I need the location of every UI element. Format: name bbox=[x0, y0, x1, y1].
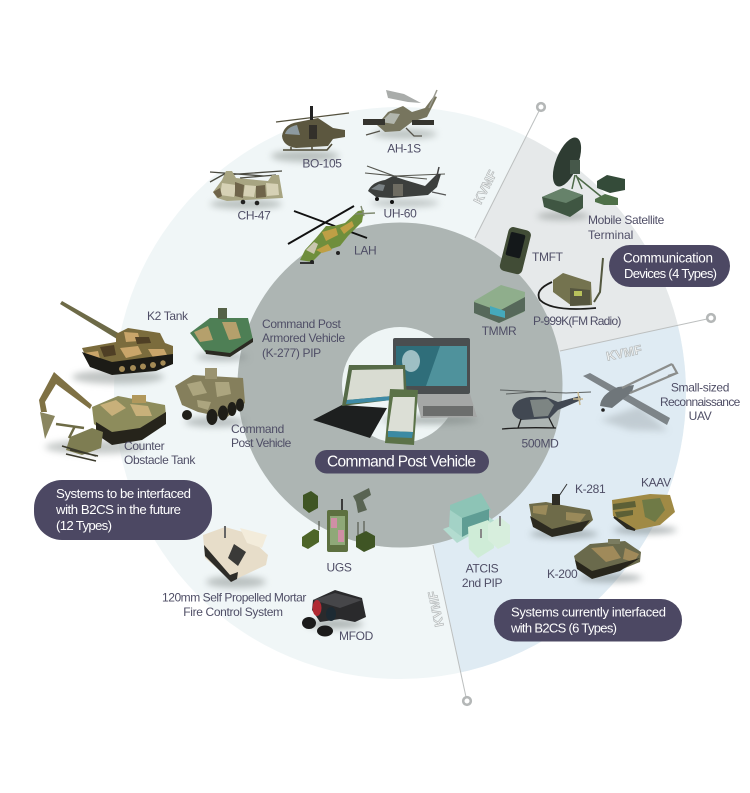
icon: CH-47 helicopter bbox=[210, 171, 283, 209]
label: LAH: LAH bbox=[354, 244, 376, 258]
label: K-281: K-281 bbox=[575, 482, 606, 496]
icon: KAAV vehicle bbox=[612, 494, 677, 534]
pill: command post vehicle bbox=[315, 450, 489, 474]
label: AH-1S: AH-1S bbox=[387, 142, 421, 156]
connector: KVMF line right bbox=[560, 314, 715, 351]
icon: UH-60 helicopter bbox=[365, 166, 446, 207]
pill: systems currently interfaced bbox=[494, 599, 682, 642]
label: ATCIS 2nd PIP bbox=[462, 562, 502, 590]
icon: command post vehicle bbox=[175, 368, 245, 427]
label: TMMR: TMMR bbox=[482, 324, 517, 338]
icon: counter obstacle tank bbox=[39, 372, 166, 461]
label: CH-47: CH-47 bbox=[238, 208, 271, 222]
label: command post armored vehicle: Command Post bbox=[262, 317, 342, 331]
label: command post vehicle bbox=[231, 422, 292, 450]
label: counter obstacle tank: Obstacle Tank bbox=[124, 453, 196, 467]
connector: KVMF line bottom bbox=[433, 545, 471, 705]
connector: KVMF line top bbox=[475, 103, 545, 238]
icon: K2 tank bbox=[60, 301, 173, 384]
ring: inner circle bbox=[342, 327, 458, 443]
pill: systems to be interfaced in future: (12 Types) bbox=[56, 518, 112, 533]
icon: UGS sensor set bbox=[302, 488, 375, 552]
pill: command post vehicle: Command Post Vehicle bbox=[327, 454, 476, 470]
pill: systems to be interfaced in future: Systems to be interfaced bbox=[56, 486, 191, 501]
pill: communication devices bbox=[609, 245, 730, 287]
label: KVMF top: KVMF bbox=[471, 168, 500, 206]
label: KVMF bottom: KVMF bbox=[425, 590, 447, 628]
label: small-sized reconnaissance UAV: UAV bbox=[689, 409, 712, 423]
pill: systems currently interfaced: with B2CS (6 Types) bbox=[510, 620, 617, 636]
icon: command post armored vehicle bbox=[190, 308, 253, 361]
pill: systems currently interfaced: Systems currently interfaced bbox=[511, 604, 666, 620]
label: mobile satellite terminal: Terminal bbox=[588, 228, 633, 242]
ring: middle circle bbox=[238, 222, 562, 548]
label: 500MD: 500MD bbox=[522, 436, 559, 450]
label: command post armored vehicle bbox=[262, 317, 345, 360]
label: command post vehicle: Command bbox=[231, 422, 284, 436]
label: counter obstacle tank: Counter bbox=[124, 439, 165, 453]
label: K-200: K-200 bbox=[547, 567, 578, 581]
label: command post vehicle: Post Vehicle bbox=[231, 436, 292, 450]
icon: P-999K FM radio bbox=[538, 258, 603, 309]
icon: BO-105 helicopter bbox=[271, 106, 349, 162]
icon: 500MD helicopter bbox=[500, 390, 591, 429]
pill: communication devices: Communication bbox=[623, 250, 713, 266]
label: KVMF right: KVMF bbox=[605, 342, 643, 364]
pill: systems to be interfaced in future: with B2CS in the future bbox=[55, 502, 181, 517]
label: UGS: UGS bbox=[327, 560, 352, 574]
label: mobile satellite terminal: Mobile Satellite bbox=[588, 213, 665, 227]
pill: systems to be interfaced in future bbox=[34, 480, 212, 540]
icon: K-281 vehicle bbox=[529, 484, 598, 538]
icon: TMFT handheld bbox=[499, 226, 532, 275]
diagram: concentric rings and sectors bbox=[114, 102, 716, 706]
icon: ATCIS buildings bbox=[443, 493, 510, 558]
label: BO-105: BO-105 bbox=[302, 156, 342, 170]
label: command post armored vehicle: (K-277) PIP bbox=[262, 346, 321, 360]
icon: mobile satellite terminal bbox=[537, 134, 625, 220]
label: 120mm self propelled mortar fire control system bbox=[162, 590, 306, 619]
label: mobile satellite terminal bbox=[588, 213, 665, 242]
icon: AH-1S helicopter bbox=[363, 90, 437, 139]
label: command post armored vehicle: Armored Vehicle bbox=[262, 331, 345, 345]
icon: MFOD binoculars bbox=[302, 590, 366, 636]
label: P-999K FM radio: P-999K(FM Radio) bbox=[533, 314, 621, 328]
sector: communication devices bbox=[474, 137, 678, 352]
label: TMFT: TMFT bbox=[532, 250, 564, 264]
label: ATCIS 2nd PIP: ATCIS bbox=[466, 562, 499, 576]
sector: currently interfaced systems bbox=[434, 326, 686, 672]
label: small-sized reconnaissance UAV bbox=[660, 380, 741, 423]
label: counter obstacle tank bbox=[124, 439, 196, 467]
label: UH-60: UH-60 bbox=[384, 206, 417, 220]
icon: 120mm self propelled mortar bbox=[203, 526, 268, 588]
label: small-sized reconnaissance UAV: Reconnaissance bbox=[660, 395, 741, 409]
label: 120mm self propelled mortar fire control system: 120mm Self Propelled Mortar bbox=[162, 590, 306, 604]
icon: TMMR radio bbox=[474, 285, 525, 323]
label: K2 tank: K2 Tank bbox=[147, 309, 189, 323]
label: KAAV: KAAV bbox=[641, 476, 671, 490]
label: 120mm self propelled mortar fire control system: Fire Control System bbox=[183, 605, 283, 619]
icon: LAH helicopter bbox=[288, 206, 375, 264]
label: MFOD: MFOD bbox=[339, 629, 374, 643]
icon: command post laptop, tablet and handset bbox=[313, 338, 478, 445]
label: ATCIS 2nd PIP: 2nd PIP bbox=[462, 576, 502, 590]
pill: communication devices: Devices (4 Types) bbox=[624, 266, 717, 281]
ring: future systems sector bbox=[114, 107, 686, 679]
icon: K-200 vehicle bbox=[574, 539, 642, 582]
icon: reconnaissance UAV bbox=[583, 364, 677, 431]
label: small-sized reconnaissance UAV: Small-sized bbox=[671, 380, 729, 394]
